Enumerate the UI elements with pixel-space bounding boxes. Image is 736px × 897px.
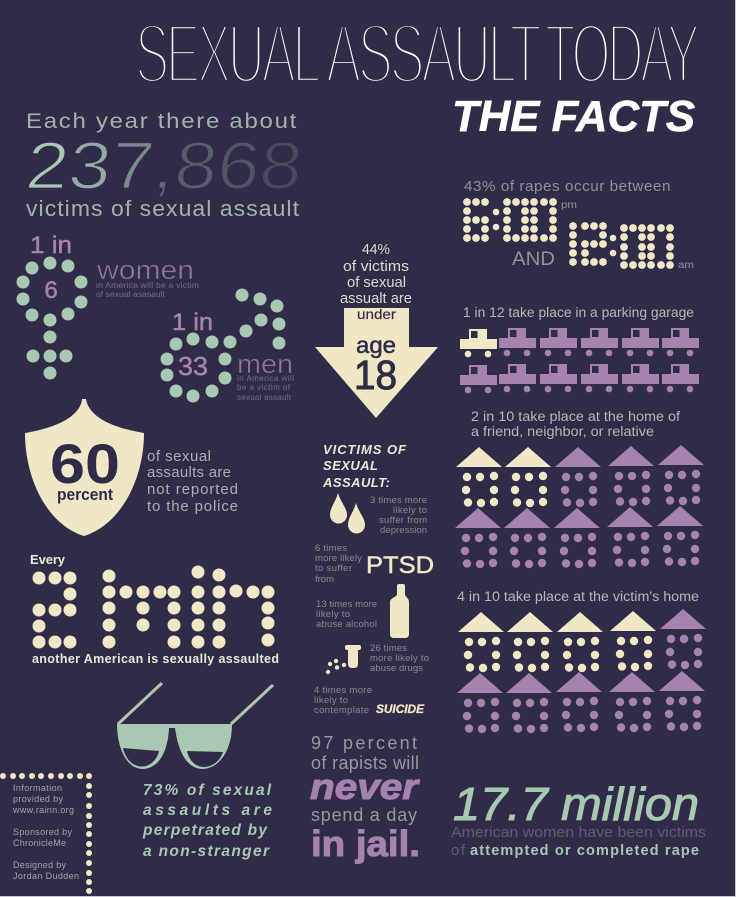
stat: 43% between 6pm and 12am: pm <box>561 200 577 211</box>
cars <box>460 328 699 393</box>
text: drugs: more likely to <box>370 653 429 664</box>
stat: 44% under age 18: of victims <box>343 259 409 275</box>
stat: 1 in 6 women: of sexual asasault <box>96 289 166 299</box>
dot letters: 2min <box>32 566 274 648</box>
stat: 237,868 victims per year: victims of sexual assault <box>26 196 300 221</box>
stat: 44% under age 18: assualt are <box>340 291 412 307</box>
stat: 1 in 33 men: sexual assault <box>237 393 292 402</box>
stat: 1 in 12 parking garage <box>460 305 699 393</box>
text: alcohol: likely to <box>316 609 350 620</box>
stat: 97 percent of rapists: 97 percent <box>311 733 417 753</box>
stat: 1 in 33 men <box>160 288 294 402</box>
arrow <box>315 308 438 418</box>
credits box: Jordan Dudden <box>13 871 79 881</box>
stat: 17.7 million: American women have been victims <box>451 824 706 841</box>
stat: 237,868 victims per year: 237,868 <box>22 129 306 203</box>
stat: 44% under age 18: 18 <box>354 352 397 398</box>
dotted border <box>0 773 92 894</box>
stat: 60 percent shield <box>25 399 238 536</box>
icon: female symbol of dots <box>16 256 88 380</box>
stat: 17.7 million: of <box>451 842 466 859</box>
icon: sunglasses <box>117 683 273 769</box>
text: depression: 3 times more <box>370 495 427 506</box>
icon: tear drops <box>330 493 365 534</box>
stat: every 2 min: Every <box>30 552 66 567</box>
stat: 1 in 33 men: be a victim of <box>237 383 291 392</box>
stat: 1 in 33 men: 33 <box>178 351 208 381</box>
stat: 17.7 million <box>451 778 706 859</box>
stat: 73% non-stranger <box>142 782 272 860</box>
icon: male symbol of dots <box>160 288 286 402</box>
stat: 43% between 6pm and 12am: am <box>678 260 694 271</box>
icon: shield <box>25 399 144 536</box>
stat: 73% non-stranger: assaults are <box>143 802 272 819</box>
stat: 1 in 6 women: 6 <box>44 277 58 304</box>
heading: victims of sexual assault: VICTIMS OF <box>323 442 407 457</box>
text: PTSD: 6 times <box>315 543 347 554</box>
dot clock: 6:00 <box>463 198 557 242</box>
text: suicide: SUICIDE <box>376 704 424 716</box>
stat: 1 in 6 women: women <box>96 255 194 285</box>
stat: 97 percent of rapists: of rapists will <box>311 753 419 773</box>
stat: every 2 min <box>30 552 279 666</box>
subtitle: the facts: THE FACTS <box>452 92 695 141</box>
stat: 44% under age 18: of sexual <box>347 275 406 291</box>
text: PTSD: from <box>315 574 334 585</box>
text: depression <box>370 495 427 536</box>
stat: 237,868 victims per year: Each year there about <box>26 110 298 133</box>
stat: 73% non-stranger: 73% of sexual <box>143 782 272 799</box>
credits box: provided by <box>13 794 64 804</box>
text: drugs <box>370 643 429 674</box>
dot clock: 12:00 <box>569 222 674 269</box>
title: SEXUAL <box>135 8 320 101</box>
stat: 1 in 33 men: men <box>237 349 293 379</box>
text: drugs: abuse drugs <box>370 663 423 674</box>
stat: 1 in 6 women: in America will be a victim <box>96 280 199 290</box>
stat: 1 in 33 men: 1 in <box>172 309 213 336</box>
stat: 97 percent of rapists <box>310 733 420 864</box>
stat: 1 in 6 women: 1 in <box>30 232 72 259</box>
stat: 1 in 33 men: in America will <box>237 374 294 383</box>
heading: victims of sexual assault <box>322 442 407 490</box>
stat: 4 in 10 victim's home <box>457 589 706 733</box>
stat: 2 in 10 home of a friend: 2 in 10 take place at the home of <box>471 409 680 424</box>
credits box: Designed by <box>13 860 66 870</box>
stat: 43% between 6pm and 12am: AND <box>512 249 555 270</box>
text: depression: suffer from <box>379 515 427 526</box>
icon: pill bottle and pills <box>326 645 361 674</box>
stat: 44% under age 18: age <box>356 332 396 358</box>
stat: every 2 min: another American is sexually assaulted <box>32 652 279 666</box>
credits box: ChronicleMe <box>13 838 66 848</box>
stat: 60 percent shield: not reported <box>147 481 238 498</box>
stat: 1 in 6 women <box>16 232 199 380</box>
text: suicide: likely to <box>314 695 348 706</box>
text: depression: depression <box>380 525 427 536</box>
stat: 43% between 6pm and 12am: 43% of rapes occur between <box>464 179 671 195</box>
text: suicide: 4 times more <box>314 685 372 696</box>
stat: 17.7 million: attempted or completed rape <box>470 843 699 859</box>
credits box: www.rainn.org <box>12 805 74 815</box>
title: ASSAULT <box>326 8 541 101</box>
heading: victims of sexual assault: SEXUAL <box>323 458 378 473</box>
text: PTSD: more likely <box>315 553 362 564</box>
stat: 97 percent of rapists: in jail. <box>311 823 420 864</box>
stat: 17.7 million: 17.7 million <box>453 778 699 830</box>
credits box: Information <box>13 783 62 793</box>
stat: 73% non-stranger: perpetrated by <box>142 822 268 839</box>
stat: 44% under age 18: 44% <box>362 242 390 258</box>
text: PTSD: to suffer <box>315 563 352 574</box>
stat: 44% under age 18: under <box>357 306 396 322</box>
stat: 43% between 6pm and 12am <box>463 179 694 271</box>
stat: 60 percent shield: to the police <box>147 498 238 515</box>
text: PTSD <box>315 543 434 585</box>
stat: 97 percent of rapists: never <box>310 766 420 807</box>
text: alcohol: 13 times more <box>316 599 377 610</box>
stat: 60 percent shield: of sexual <box>147 448 211 465</box>
icon: bottle <box>390 584 409 638</box>
stat: 60 percent shield: percent <box>57 486 113 504</box>
text: PTSD: PTSD <box>366 552 434 579</box>
stat: 60 percent shield: assaults are <box>147 464 231 481</box>
text: alcohol <box>316 599 377 630</box>
houses <box>457 609 706 733</box>
text: alcohol: abuse alcohol <box>316 619 377 630</box>
text: suicide <box>314 685 424 716</box>
title: TODAY <box>545 8 699 101</box>
text: suicide: contemplate <box>314 705 369 716</box>
text: depression: likely to <box>393 505 427 516</box>
text: drugs: 26 times <box>370 643 407 654</box>
houses <box>455 445 704 568</box>
stat: 4 in 10 victim's home: 4 in 10 take place at the victim's home <box>457 589 699 604</box>
stat: 44% under age 18 <box>315 242 438 418</box>
stat: 73% non-stranger: a non-stranger <box>143 843 270 860</box>
stat: 97 percent of rapists: spend a day <box>311 805 417 825</box>
credits box: Sponsored by <box>13 827 72 837</box>
stat: 60 percent shield: 60 <box>50 432 120 495</box>
stat: 237,868 victims per year <box>22 110 306 221</box>
heading: victims of sexual assault: ASSAULT: <box>322 475 390 490</box>
credits box <box>0 773 92 894</box>
title <box>135 8 699 101</box>
stat: 2 in 10 home of a friend: a friend, neighbor, or relative <box>471 424 654 439</box>
stat: 1 in 12 parking garage: 1 in 12 take place in a parking garage <box>463 305 694 320</box>
stat: 2 in 10 home of a friend <box>455 409 704 568</box>
